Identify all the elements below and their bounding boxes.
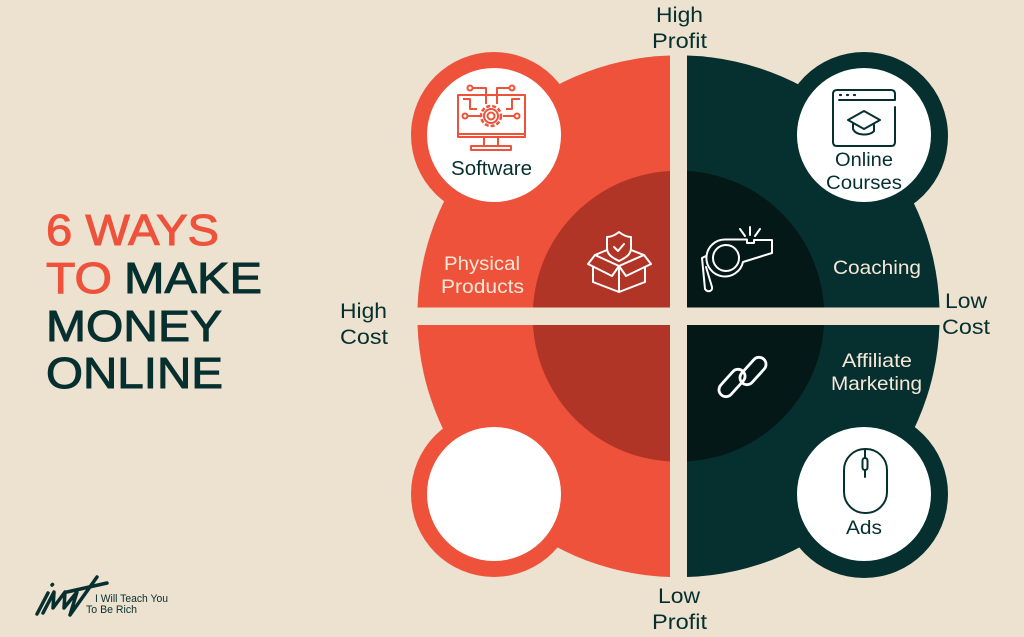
axis label: high profit: [652, 4, 707, 53]
axis label: low profit: Profit: [652, 611, 707, 634]
axis label: high cost: [340, 300, 388, 349]
title: TO: [46, 254, 112, 303]
label: Online: [835, 149, 893, 171]
axis label: low cost: Cost: [942, 316, 990, 339]
axis label: high cost: Cost: [340, 326, 388, 349]
label: Ads: [846, 517, 882, 539]
label: Software: [451, 158, 532, 180]
circle: software: [427, 68, 561, 202]
quadrant: high cost low profit: [411, 325, 670, 577]
label: physical products: Physical: [444, 253, 520, 275]
axis label: low profit: Low: [658, 585, 701, 608]
title: 6 WAYS: [46, 206, 219, 255]
logo text: I Will Teach You: [95, 593, 168, 605]
logo text: To Be Rich: [86, 604, 137, 616]
axis label: low profit: [652, 585, 707, 634]
logo: [37, 577, 168, 616]
label: physical products: [441, 253, 524, 298]
icon: browser with graduation cap: [833, 90, 895, 146]
axis label: low cost: [942, 290, 990, 339]
label: affiliate marketing: Affiliate: [842, 350, 912, 372]
title: MONEY: [46, 302, 222, 351]
label: [826, 149, 902, 194]
inner quadrant: [687, 171, 824, 308]
quadrant: low cost high profit: [687, 52, 948, 308]
quadrant: low cost low profit: [687, 325, 948, 578]
title: MAKE: [124, 254, 262, 303]
icon: whistle: [702, 227, 772, 291]
label: coaching: Coaching: [833, 257, 921, 279]
logo text: [86, 593, 168, 616]
quadrant: high cost high profit: [411, 52, 670, 308]
icon: box with shield: [588, 232, 651, 292]
circle: ads: [797, 427, 931, 561]
inner quadrant: [533, 325, 670, 462]
axis label: high profit: Profit: [652, 30, 707, 53]
circle: online courses: [797, 68, 931, 202]
label: Courses: [826, 172, 902, 194]
label: affiliate marketing: Marketing: [831, 373, 922, 395]
blank white circle: [427, 427, 561, 561]
logo mark: [37, 577, 107, 615]
axis label: low cost: Low: [945, 290, 988, 313]
label: physical products: Products: [441, 276, 524, 298]
axis label: high profit: High: [656, 4, 703, 27]
inner quadrant: [533, 171, 670, 308]
inner quadrant: [687, 325, 824, 462]
label: affiliate marketing: [831, 350, 922, 395]
icon: chain link: [716, 354, 769, 400]
title: [46, 206, 262, 398]
icon: mouse: [844, 449, 887, 513]
title: ONLINE: [46, 349, 223, 398]
icon: monitor with gear: [458, 86, 525, 150]
axis label: high cost: High: [340, 300, 387, 323]
